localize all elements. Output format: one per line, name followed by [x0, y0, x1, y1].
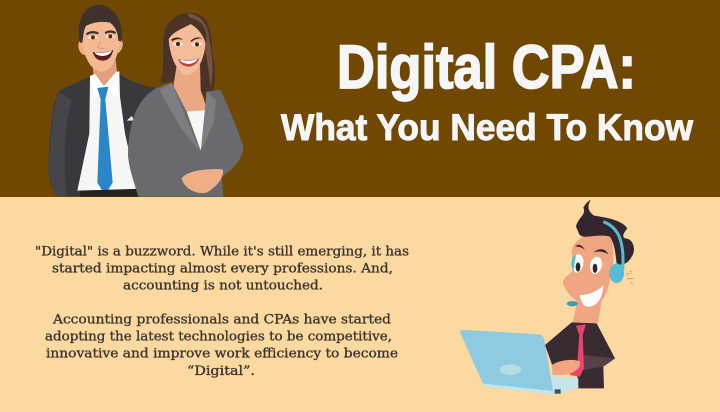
agent pupils [576, 262, 580, 272]
text block: intro paragraph [35, 244, 409, 294]
woman blouse [187, 110, 208, 151]
man shirt [77, 71, 137, 191]
man tie [97, 87, 113, 195]
man face [82, 17, 119, 72]
text block: intro paragraph: "Digital" is a buzzword. While it's still emerging, it has [35, 244, 409, 260]
agent eyes [572, 254, 602, 274]
woman hair highlight [187, 13, 213, 87]
laptop logo [500, 364, 521, 375]
headset band [603, 222, 623, 270]
man jacket [48, 74, 155, 196]
woman eyes [173, 42, 203, 46]
woman brows [171, 37, 203, 42]
woman irises [176, 42, 199, 46]
woman teeth [180, 59, 198, 64]
agent tie [569, 324, 586, 377]
woman lapels [159, 83, 216, 152]
title: Digital CPA: Digital CPA: [337, 33, 636, 101]
man pocket square [127, 116, 135, 121]
man belt [80, 189, 145, 197]
woman hands [182, 169, 223, 193]
sound marks [626, 271, 633, 284]
headset left cup [571, 255, 576, 272]
illustration: support agent with laptop [460, 200, 634, 395]
laptop ports [555, 389, 561, 394]
woman neck and chest [173, 65, 208, 152]
woman jacket [128, 83, 243, 197]
agent eyebrows [575, 245, 608, 254]
microphone tip [567, 301, 578, 306]
man brows [86, 30, 116, 35]
text block: second paragraph [45, 312, 398, 379]
text block: intro paragraph: accounting is not untouched. [123, 278, 323, 294]
text block: second paragraph: adopting the latest technologies to be competitive, [45, 330, 392, 344]
laptop screen [460, 330, 553, 392]
man teeth [94, 51, 112, 56]
illustration: businessman and businesswoman [48, 5, 243, 197]
agent smile [580, 285, 603, 307]
man hair [79, 5, 122, 43]
man nose [98, 42, 105, 49]
woman hair [160, 13, 215, 104]
panel: lower cream background [0, 197, 720, 412]
text block: intro paragraph: started impacting almost every professions. And, [52, 262, 393, 276]
laptop base [482, 372, 578, 395]
agent hair [576, 200, 634, 265]
man jacket sleeve highlight [48, 92, 72, 196]
text block: second paragraph: Accounting professionals and CPAs have started [52, 312, 391, 328]
man neck [93, 55, 117, 86]
man eyes [87, 35, 115, 39]
woman hair fringe [167, 18, 207, 43]
text block: second paragraph: “Digital”. [187, 364, 255, 379]
agent hand [552, 360, 580, 375]
subtitle: What You Need To Know: What You Need To Know [281, 107, 693, 148]
woman mouth [178, 58, 199, 67]
headset ear cup [609, 264, 624, 283]
agent jacket [545, 322, 615, 388]
man collar [90, 71, 119, 100]
agent sleeve [583, 355, 615, 370]
man ears [78, 40, 123, 55]
woman face [169, 23, 205, 75]
panel: brown header [0, 0, 720, 197]
headset microphone [562, 287, 568, 302]
man mouth [93, 50, 113, 61]
text block: second paragraph: innovative and improve work efficiency to become [46, 346, 398, 362]
agent neck [573, 295, 603, 323]
man irises [91, 34, 112, 39]
agent face [563, 233, 613, 306]
